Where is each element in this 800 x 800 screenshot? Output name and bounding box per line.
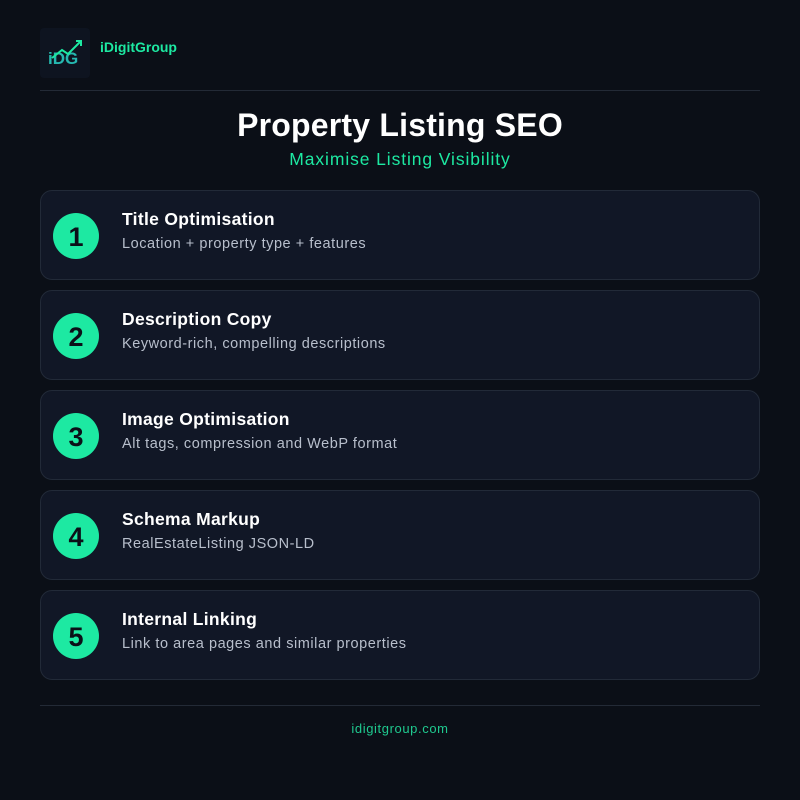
card 1: 1 [68, 222, 84, 252]
card 5: Internal Linking [122, 609, 257, 629]
title: Property Listing SEO [237, 107, 563, 143]
card 2: Description Copy [122, 309, 272, 329]
card 3 [40, 390, 760, 480]
card 1 [40, 190, 760, 280]
logo [40, 28, 90, 78]
logo: iDG [48, 49, 78, 68]
card 1: Location + property type + features [122, 236, 366, 252]
card 4: Schema Markup [122, 509, 260, 529]
card 3: Alt tags, compression and WebP format [122, 436, 397, 452]
card 3: 3 [68, 422, 84, 452]
card 5 [40, 590, 760, 680]
brand name: iDigitGroup [100, 39, 177, 55]
footer: idigitgroup.com [351, 721, 449, 736]
card 2: Keyword-rich, compelling descriptions [122, 336, 386, 352]
card 4: RealEstateListing JSON-LD [122, 536, 315, 552]
subtitle: Maximise Listing Visibility [289, 149, 511, 169]
card 1: Title Optimisation [122, 209, 275, 229]
card 4 [40, 490, 760, 580]
card 5: 5 [68, 622, 84, 652]
card 2: 2 [68, 322, 84, 352]
card 5: Link to area pages and similar properties [122, 636, 406, 652]
card 2 [40, 290, 760, 380]
card 3: Image Optimisation [122, 409, 290, 429]
card 4: 4 [68, 522, 84, 552]
